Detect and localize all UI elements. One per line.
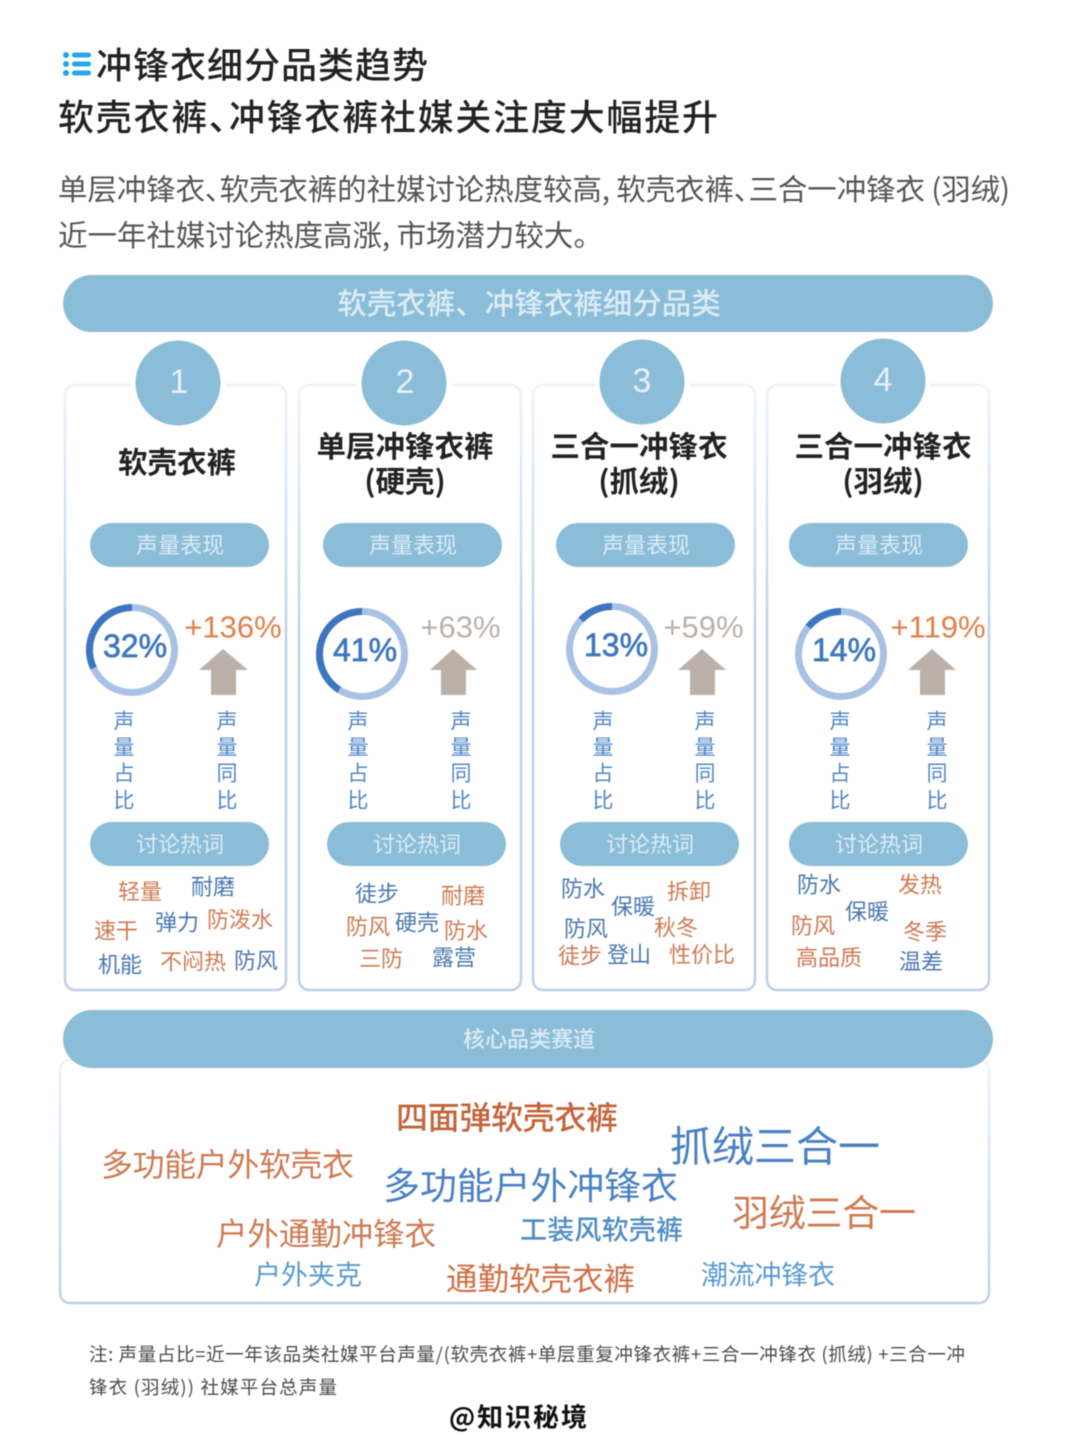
keywords: 保暖	[611, 894, 655, 920]
keywords: 防水	[797, 872, 841, 898]
subtitle: 软壳衣裤、冲锋衣裤社媒关注度大幅提升	[58, 89, 718, 141]
label: share: 占	[592, 762, 614, 786]
keywords: 温差	[899, 950, 943, 974]
banner: subcategories	[63, 275, 993, 332]
label: share	[830, 710, 850, 812]
keywords: 防风	[234, 948, 278, 974]
keywords: 露营	[432, 946, 476, 970]
donut: 32%	[75, 593, 189, 707]
label: share	[348, 710, 368, 812]
pill: volume: 声量表现	[835, 528, 923, 560]
watermark: @知识秘境	[449, 1398, 587, 1434]
donut: 13%	[552, 589, 672, 709]
word cloud: 工装风软壳裤	[520, 1208, 683, 1248]
pill: keywords: 讨论热词	[136, 827, 224, 859]
label: yoy: 比	[216, 790, 238, 812]
keywords: 秋冬	[654, 916, 698, 940]
card title: 三合一冲锋衣	[550, 424, 728, 466]
keywords: 发热	[898, 872, 942, 898]
growth +119%: +119%	[890, 610, 986, 644]
label: share: 量	[592, 736, 614, 760]
keywords: 防风	[346, 914, 390, 940]
badge 1	[136, 340, 220, 426]
label: yoy: 比	[450, 790, 472, 812]
badge 2: 2	[396, 363, 414, 401]
label: yoy: 同	[694, 762, 716, 786]
label: share: 占	[348, 762, 368, 786]
pill: volume	[90, 523, 269, 567]
arrow	[199, 649, 248, 695]
label: share: 占	[114, 762, 134, 786]
growth +59%: +59%	[663, 610, 744, 644]
label: yoy: 声	[926, 710, 948, 734]
keywords: 防水	[444, 918, 488, 944]
icon: title list	[63, 52, 91, 76]
word cloud: 多功能户外冲锋衣	[383, 1156, 678, 1210]
keywords: 性价比	[669, 942, 735, 968]
keywords: 弹力	[155, 910, 199, 936]
pill: volume: 声量表现	[369, 528, 457, 560]
keywords: 速干	[94, 918, 138, 944]
banner: core tracks: 核心品类赛道	[463, 1022, 595, 1054]
donut: 41%: 41%	[333, 632, 397, 668]
label: yoy: 量	[694, 736, 716, 760]
label: yoy	[694, 710, 716, 812]
intro text: 单层冲锋衣、软壳衣裤的社媒讨论热度较高, 软壳衣裤、三合一冲锋衣 (羽绒)	[58, 167, 1010, 209]
arrow	[430, 649, 477, 695]
keywords: 轻量	[118, 880, 162, 904]
keywords: 三防	[359, 946, 403, 972]
label: share: 量	[348, 736, 368, 760]
keywords: 耐磨	[441, 884, 485, 908]
card title: 三合一冲锋衣	[794, 424, 972, 466]
panel: card 4	[767, 338, 989, 990]
pill: keywords: 讨论热词	[835, 827, 923, 859]
label: share	[114, 710, 134, 812]
word cloud: 户外通勤冲锋衣	[216, 1209, 436, 1255]
label: share: 声	[830, 710, 850, 734]
panel: card 3	[533, 340, 755, 990]
label: yoy	[216, 710, 238, 812]
footnote: 注: 声量占比=近一年该品类社媒平台声量/(软壳衣裤+单层重复冲锋衣裤+三合一冲锋衣 (抓绒) +三合一冲	[89, 1341, 965, 1367]
label: yoy: 声	[450, 710, 472, 734]
label: share: 声	[348, 710, 368, 734]
keywords	[346, 882, 488, 972]
badge 2	[362, 340, 446, 426]
label: yoy: 同	[216, 762, 238, 786]
label: share: 量	[830, 736, 850, 760]
pill: keywords	[789, 822, 968, 866]
keywords: 冬季	[903, 920, 947, 944]
word cloud: 羽绒三合一	[732, 1183, 916, 1237]
card title: 单层冲锋衣裤	[316, 424, 494, 466]
keywords: 保暖	[845, 900, 889, 924]
badge 4: 4	[874, 361, 892, 399]
arrow	[908, 649, 956, 695]
label: yoy: 比	[926, 790, 948, 812]
badge 3	[600, 340, 684, 424]
label: share	[592, 710, 614, 812]
word cloud: 通勤软壳衣裤	[446, 1254, 635, 1300]
pill: keywords: 讨论热词	[373, 827, 461, 859]
label: yoy: 量	[926, 736, 948, 760]
label: share: 比	[830, 790, 850, 812]
banner: core tracks	[63, 1010, 993, 1068]
pill: keywords: 讨论热词	[606, 827, 694, 859]
pill: keywords	[327, 822, 506, 866]
pill: volume: 声量表现	[136, 528, 224, 560]
word cloud: 潮流冲锋衣	[701, 1254, 835, 1292]
donut: 13%: 13%	[584, 627, 648, 663]
keywords: 徒步	[558, 944, 602, 968]
word cloud: 抓绒三合一	[670, 1114, 880, 1174]
label: yoy: 同	[450, 762, 472, 786]
label: yoy	[450, 710, 472, 812]
footnote: 锋衣 (羽绒)) 社媒平台总声量	[89, 1374, 337, 1400]
keywords: 徒步	[355, 882, 399, 906]
badge 4	[840, 338, 926, 424]
donut: 14%: 14%	[812, 632, 876, 668]
word cloud	[101, 1093, 916, 1300]
card title: (抓绒)	[598, 459, 680, 501]
keywords: 不闷热	[160, 950, 226, 974]
footnote	[89, 1341, 965, 1400]
keywords: 高品质	[796, 946, 862, 970]
label: share: 声	[592, 710, 614, 734]
label: share: 比	[114, 790, 134, 812]
keywords: 防风	[791, 914, 835, 938]
label: yoy: 声	[216, 710, 238, 734]
keywords: 登山	[607, 942, 651, 968]
intro text	[58, 167, 1010, 255]
panel: core tracks	[60, 1010, 993, 1303]
pill: volume	[323, 523, 502, 567]
pill: volume	[789, 523, 968, 567]
pill: volume: 声量表现	[602, 528, 690, 560]
label: yoy: 同	[926, 762, 948, 786]
label: share: 声	[114, 710, 134, 734]
keywords: 硬壳	[395, 910, 439, 936]
label: share: 比	[592, 790, 614, 812]
keywords: 防风	[564, 916, 608, 942]
panel: card 2	[299, 340, 521, 990]
banner: subcategories: 软壳衣裤、冲锋衣裤细分品类	[337, 281, 721, 323]
card title	[794, 424, 972, 501]
label: share: 量	[114, 736, 134, 760]
label: yoy: 比	[694, 790, 716, 812]
card title: 软壳衣裤	[118, 440, 236, 482]
intro text: 近一年社媒讨论热度高涨, 市场潜力较大。	[58, 213, 588, 255]
arrow	[678, 649, 726, 695]
label: share: 占	[830, 762, 850, 786]
card title	[550, 424, 728, 501]
keywords	[791, 872, 947, 974]
label: share: 比	[348, 790, 368, 812]
badge 3: 3	[633, 362, 651, 400]
keywords: 机能	[98, 952, 142, 978]
donut: 14%	[781, 594, 901, 714]
donut: 32%: 32%	[103, 628, 167, 664]
label: yoy	[926, 710, 948, 812]
label: yoy: 量	[216, 736, 238, 760]
pill: keywords	[560, 822, 739, 866]
donut: 41%	[303, 595, 421, 713]
pill: volume	[556, 523, 735, 567]
card title: (羽绒)	[842, 459, 924, 501]
badge 1: 1	[170, 363, 188, 401]
label: yoy: 量	[450, 736, 472, 760]
card title: (硬壳)	[364, 459, 446, 501]
pill: keywords	[90, 822, 269, 866]
card title	[316, 424, 494, 501]
word cloud: 户外夹克	[254, 1254, 362, 1292]
keywords	[94, 874, 278, 978]
keywords: 拆卸	[667, 880, 711, 904]
keywords: 防泼水	[207, 908, 273, 932]
title: 冲锋衣细分品类趋势	[96, 37, 428, 89]
keywords: 耐磨	[191, 874, 235, 900]
keywords: 防水	[561, 876, 605, 902]
panel: card 1	[65, 340, 286, 990]
word cloud: 多功能户外软壳衣	[101, 1140, 354, 1186]
growth +63%: +63%	[420, 610, 501, 644]
growth +136%: +136%	[184, 610, 282, 644]
label: yoy: 声	[694, 710, 716, 734]
keywords	[558, 876, 735, 968]
word cloud: 四面弹软壳衣裤	[396, 1093, 618, 1139]
